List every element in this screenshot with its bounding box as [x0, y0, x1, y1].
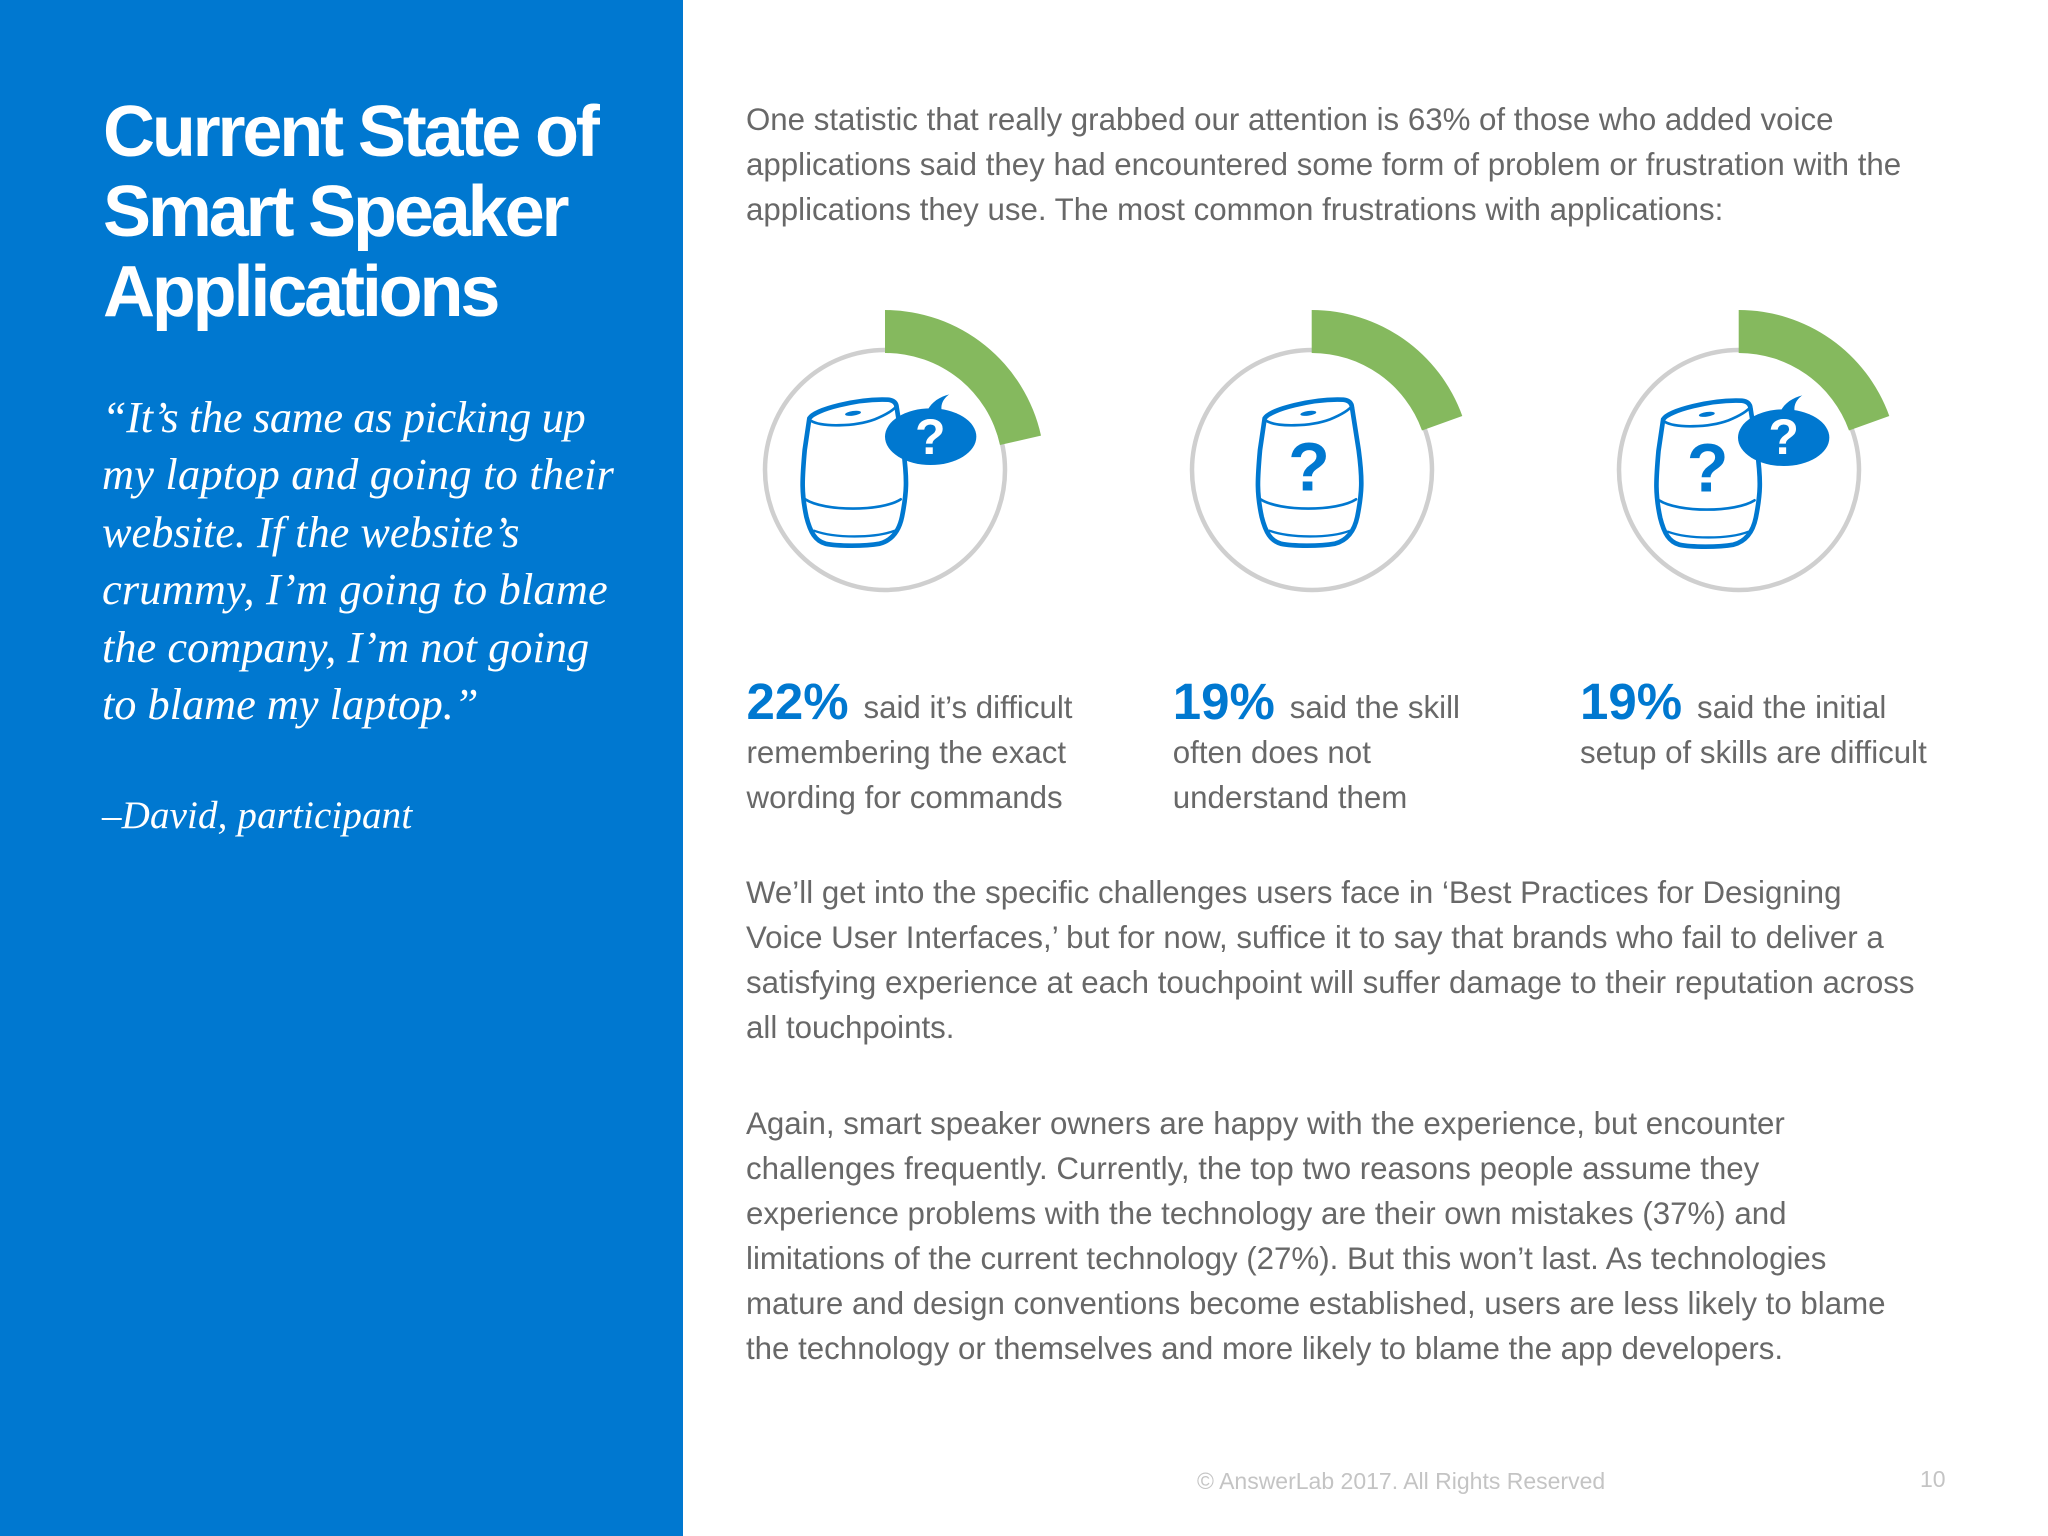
- stat: 19% initial setup: 19% said the initial: [1580, 672, 1886, 730]
- stat: 19% skill understanding: often does not: [1173, 734, 1371, 770]
- intro paragraph: applications said they had encountered some form of problem or frustration with the: [746, 146, 1901, 182]
- paragraph: specific challenges: all touchpoints.: [746, 1010, 954, 1044]
- paragraph: who gets blamed: Again, smart speaker owners are happy with the experience, but encounter: [746, 1106, 1785, 1140]
- title: Smart Speaker: [103, 172, 566, 252]
- title: Current State of: [103, 92, 597, 172]
- gauge 2: 19%: ?: [1288, 430, 1330, 506]
- paragraph: specific challenges: satisfying experience at each touchpoint will suffer damage to their reputation across: [746, 964, 1914, 1000]
- paragraph: specific challenges: [746, 874, 1914, 1044]
- quote: “It’s the same as picking up: [102, 393, 585, 442]
- gauge 3: 19%: [1619, 310, 1889, 590]
- stat: 19% skill understanding: understand them: [1173, 780, 1407, 814]
- paragraph: specific challenges: We’ll get into the specific challenges users face in ‘Best Practices for Designing: [746, 874, 1841, 910]
- quote: crummy, I’m going to blame: [102, 565, 608, 614]
- intro paragraph: One statistic that really grabbed our attention is 63% of those who added voice: [746, 102, 1833, 136]
- quote: the company, I’m not going: [102, 623, 589, 672]
- stat: 22%: [746, 672, 1072, 814]
- quote attribution: –David, participant: [102, 794, 412, 837]
- paragraph: who gets blamed: experience problems with the technology are their own mistakes (37%) and: [746, 1196, 1786, 1230]
- stat: 22%: wording for commands: [746, 780, 1063, 814]
- quote: [102, 393, 614, 729]
- gauge 3: 19%: ?: [1768, 409, 1799, 465]
- quote: website. If the website’s: [102, 508, 520, 557]
- gauge 1: 22%: [765, 310, 1041, 590]
- paragraph: who gets blamed: limitations of the current technology (27%). But this won’t last. As technologies: [746, 1240, 1826, 1276]
- paragraph: who gets blamed: mature and design conventions become established, users are less likely to blame: [746, 1286, 1886, 1320]
- title: [103, 92, 600, 332]
- stat: 19% initial setup: setup of skills are difficult: [1580, 734, 1927, 770]
- paragraph: who gets blamed: [746, 1106, 1886, 1366]
- gauge 3: 19%: ?: [1687, 430, 1729, 506]
- gauge 2: 19%: [1192, 310, 1462, 590]
- stat: 19% initial setup: [1580, 672, 1927, 770]
- stat: 19% skill understanding: [1173, 672, 1460, 814]
- gauge 1: 22%: ?: [915, 409, 946, 465]
- stat: 22%: 22% said it’s difficult: [746, 672, 1072, 730]
- title: Applications: [103, 252, 497, 332]
- paragraph: who gets blamed: the technology or themselves and more likely to blame the app developers.: [746, 1330, 1783, 1366]
- quote: my laptop and going to their: [102, 450, 614, 499]
- intro paragraph: [746, 102, 1901, 226]
- intro paragraph: applications they use. The most common frustrations with applications:: [746, 192, 1723, 226]
- quote: to blame my laptop.”: [102, 680, 479, 729]
- page number: 10: [1920, 1466, 1946, 1492]
- stat: 22%: remembering the exact: [746, 734, 1066, 770]
- stat: 19% skill understanding: 19% said the skill: [1173, 672, 1460, 730]
- paragraph: who gets blamed: challenges frequently. Currently, the top two reasons people assume they: [746, 1150, 1759, 1186]
- footer copyright: © AnswerLab 2017. All Rights Reserved: [1197, 1468, 1605, 1494]
- panel: blue sidebar: [0, 0, 682, 1536]
- paragraph: specific challenges: Voice User Interfaces,’ but for now, suffice it to say that brands who fail to deliver a: [746, 920, 1884, 954]
